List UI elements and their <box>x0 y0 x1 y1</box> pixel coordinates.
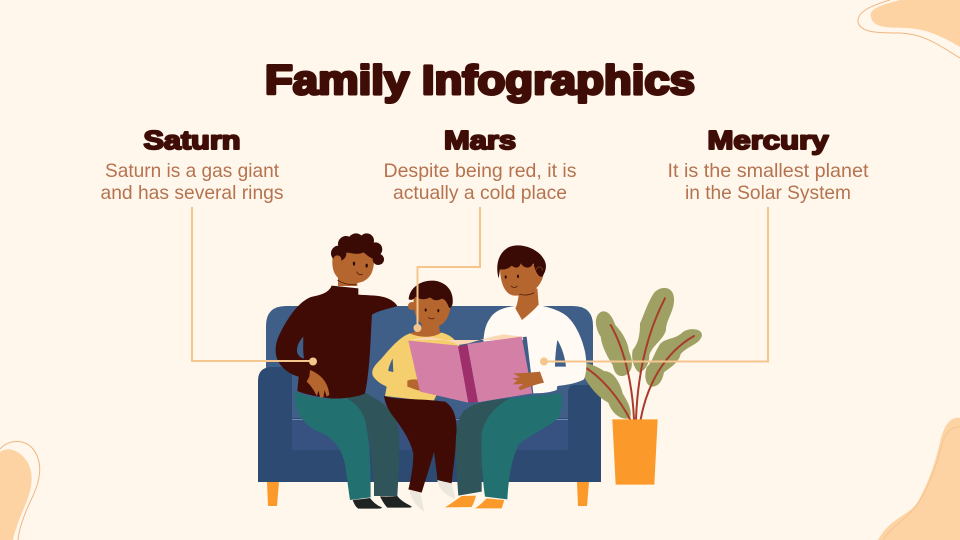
person: father right <box>408 245 586 508</box>
hand <box>307 370 329 397</box>
connector: Mars <box>414 207 480 332</box>
title: Family Infographics <box>265 57 695 103</box>
book pages edge <box>408 334 523 345</box>
leaves <box>575 288 702 419</box>
arm gap <box>388 358 393 372</box>
shirt <box>483 305 586 393</box>
column: Saturn <box>100 125 284 204</box>
text: Saturn description: and has several rings <box>100 182 284 204</box>
text: Mercury description: It is the smallest planet <box>668 160 869 182</box>
neck <box>515 288 539 320</box>
shoes <box>353 496 412 509</box>
book right page <box>467 337 532 402</box>
hair <box>409 281 453 308</box>
heading: Mars: Mars <box>444 125 516 155</box>
neck <box>338 275 357 286</box>
person: child <box>372 281 460 512</box>
connector: Saturn <box>192 207 317 366</box>
column: Mercury <box>668 125 869 204</box>
blob: bottom right <box>878 418 960 540</box>
text: Mars description: Despite being red, it is <box>384 160 577 182</box>
face details <box>333 255 368 284</box>
back leg <box>456 398 510 496</box>
person: father left <box>276 233 412 509</box>
front leg <box>295 392 371 500</box>
text: Mars description: actually a cold place <box>393 182 567 204</box>
heading: Mercury: Mercury <box>708 125 829 155</box>
back leg <box>347 393 399 496</box>
face details <box>505 267 542 295</box>
ear <box>408 302 416 310</box>
hand <box>512 372 544 390</box>
heading: Saturn: Saturn <box>144 125 240 155</box>
face details <box>425 308 439 319</box>
head <box>500 262 544 296</box>
shirt <box>372 333 460 402</box>
head <box>413 292 451 327</box>
connector: Mercury <box>540 207 768 366</box>
illustration: family on sofa <box>258 233 702 512</box>
front leg <box>481 393 562 499</box>
book left page <box>408 341 468 403</box>
neck <box>410 320 440 337</box>
hair <box>331 233 384 265</box>
text: Saturn description: Saturn is a gas giant <box>105 160 280 182</box>
socks <box>409 480 455 512</box>
sofa <box>258 306 601 506</box>
book spine <box>458 345 478 403</box>
stems <box>584 298 694 419</box>
sweater <box>276 286 397 399</box>
pot <box>612 419 658 485</box>
column: Mars <box>384 125 577 204</box>
plant <box>575 288 702 485</box>
hair <box>497 245 546 278</box>
blob: top right <box>858 0 960 58</box>
book <box>408 334 532 403</box>
head <box>332 247 374 283</box>
blob: bottom left <box>0 441 40 540</box>
child hand <box>407 379 426 392</box>
pants <box>384 396 457 493</box>
shoes <box>445 496 504 508</box>
text: Mercury description: in the Solar System <box>685 182 851 204</box>
